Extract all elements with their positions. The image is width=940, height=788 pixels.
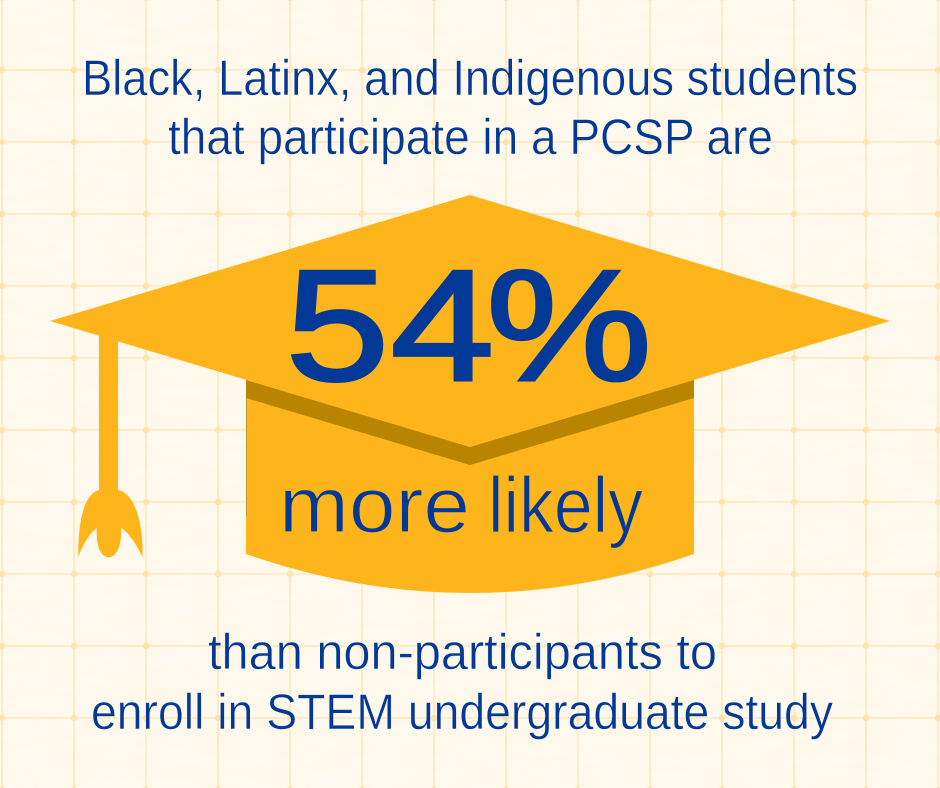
cap body (246, 380, 694, 593)
label: more likely: more (279, 460, 470, 549)
closing text: than non-participants to (208, 624, 717, 680)
cap body left edge (246, 380, 248, 516)
icon: graduation cap (50, 195, 890, 593)
closing text: enroll in STEM undergraduate study (91, 684, 833, 740)
closing text (91, 624, 833, 740)
statistic: 54%: 54% (286, 237, 652, 414)
tassel cord (99, 330, 118, 492)
heading text (82, 50, 858, 165)
cap band shadow (246, 380, 694, 465)
mortarboard (50, 195, 890, 447)
label: more likely: likely (488, 460, 643, 549)
tassel fringe (78, 490, 143, 557)
heading text: Black, Latinx, and Indigenous students (82, 50, 858, 106)
heading text: that participate in a PCSP are (168, 109, 773, 165)
